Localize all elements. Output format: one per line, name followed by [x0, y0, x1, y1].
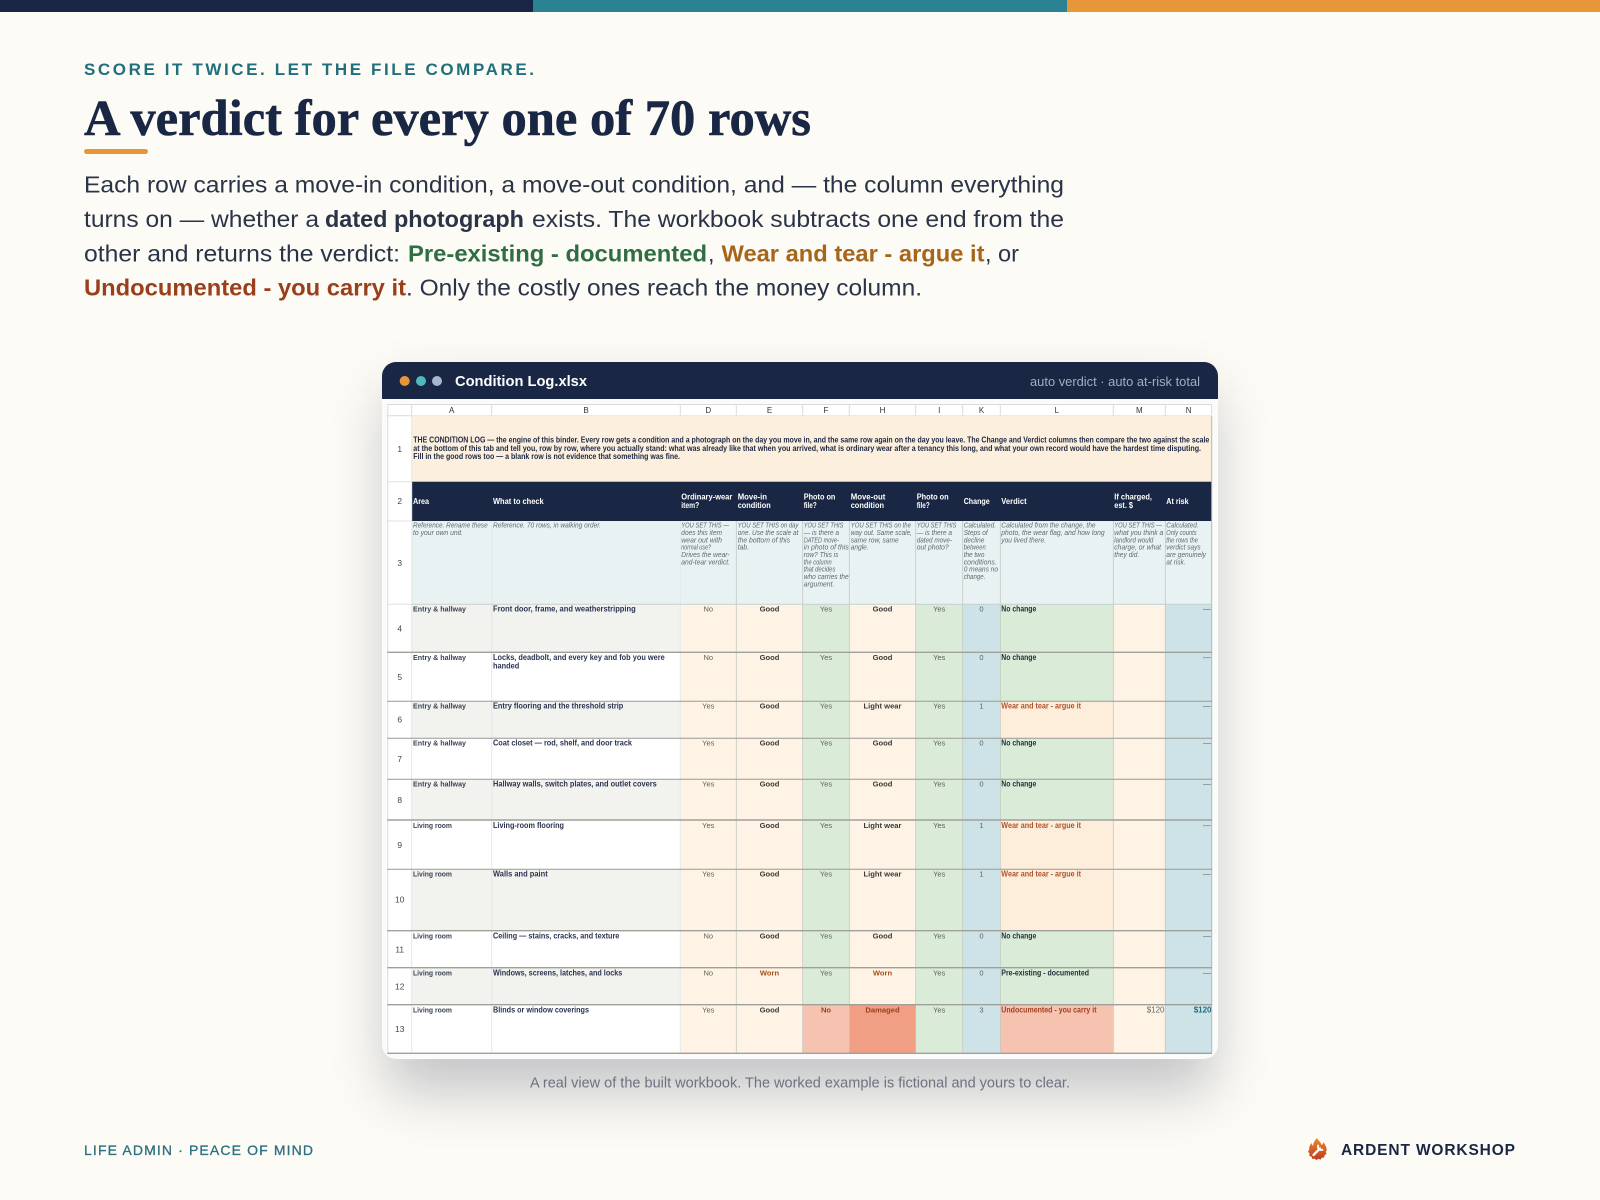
row 6: Yes [702, 702, 715, 711]
spreadsheet [387, 404, 1212, 1053]
row 7: Yes [820, 739, 832, 748]
row 13: Blinds or window coverings [493, 1006, 590, 1014]
row 12: Yes [820, 968, 832, 978]
row 4: No [704, 605, 713, 614]
row 13: Yes [933, 1006, 946, 1014]
row 13: 3 [979, 1006, 984, 1014]
row 10: Yes [702, 870, 715, 879]
row 9: Yes [820, 821, 832, 830]
data cell fills [412, 604, 1212, 1053]
row 13: Yes [702, 1006, 715, 1014]
row 11: Good [873, 932, 893, 940]
row 3: column notes: they did. [1114, 550, 1139, 559]
column letters: M [1136, 406, 1143, 415]
row 2: table header: What to check [493, 497, 544, 506]
row 12: Yes [933, 968, 946, 978]
spreadsheet window [382, 362, 1218, 1059]
row 5: Locks, deadbolt, and every key and fob you were [493, 653, 665, 662]
row 6: Entry & hallway [413, 702, 467, 711]
row 3: column notes: landlord would [1114, 535, 1154, 544]
row 5: Good [760, 653, 780, 662]
row numbers: 10 [395, 894, 405, 904]
row 1: banner: at the bottom of this tab and tell you, row by row, where you actually stand: what was already like that when you arrived, what is ordinary wear after a tenancy this long, and what your own record would have the hardest time disputing. [413, 444, 1201, 453]
intro paragraph: dated photograph [325, 206, 524, 232]
row 6: Good [760, 702, 780, 711]
row 2: table header: condition [738, 501, 771, 510]
row 9 [413, 821, 1211, 830]
row 4: Good [873, 605, 893, 614]
row 3: column notes: one. Use the scale at [738, 528, 799, 537]
row 4: No change [1001, 605, 1037, 614]
row 3: column notes: and-tear verdict. [681, 557, 730, 566]
row 8: Yes [933, 780, 946, 789]
row 13 [413, 1006, 1212, 1014]
row 10: Good [760, 870, 780, 879]
row 3: column notes: angle. [851, 543, 869, 552]
row 6: Wear and tear - argue it [1001, 702, 1081, 711]
row 12: No [704, 968, 713, 978]
row 10: Living room [413, 870, 452, 879]
row 10: Walls and paint [493, 870, 548, 879]
row 5: 0 [979, 653, 984, 662]
row 3: column notes: same row, same [851, 535, 899, 544]
row 12: — [1203, 968, 1211, 978]
row 7 [413, 739, 1211, 748]
row 11: Yes [820, 932, 832, 940]
title bar: Condition Log.xlsx [455, 373, 588, 390]
row 2: table header: Photo on [804, 492, 836, 502]
row 13: Good [760, 1006, 780, 1014]
column letters: F [824, 406, 829, 415]
row 2: table header: Move-out [851, 492, 886, 502]
row 2: table header: Change [964, 497, 990, 506]
row 8: Good [760, 780, 780, 789]
row 10: Yes [820, 870, 832, 879]
row 3: column notes: between [964, 543, 986, 552]
intro paragraph: or [998, 241, 1019, 267]
row 6: Light wear [864, 702, 902, 711]
intro paragraph: Wear and tear - argue it [722, 241, 985, 267]
row 2: table header: condition [851, 501, 884, 510]
eyebrow: SCORE IT TWICE. LET THE FILE COMPARE. [84, 60, 534, 79]
row 3: column notes: verdict says [1166, 543, 1201, 552]
row 1: banner [412, 416, 1212, 482]
row 11: No [704, 932, 713, 940]
column letters: K [979, 406, 985, 415]
row 13: $120 [1147, 1006, 1165, 1014]
row 9: Good [760, 821, 780, 830]
row numbers: 5 [397, 672, 402, 682]
row 13: No [821, 1006, 831, 1014]
row 11: Living room [413, 932, 452, 940]
intro paragraph: , [985, 241, 992, 267]
row 3: column notes: are genuinely [1166, 550, 1207, 559]
row 9: Yes [702, 821, 715, 830]
row 5: No [704, 653, 713, 662]
row 2: table header: If charged, [1114, 492, 1152, 502]
row 3: column notes: Calculated from the change, the [1001, 521, 1096, 530]
row 5: Entry & hallway [413, 653, 467, 662]
row 5: Good [873, 653, 893, 662]
row numbers: 6 [397, 714, 402, 724]
row 11: 0 [979, 932, 984, 940]
row 4: — [1203, 605, 1211, 614]
column letters: H [880, 406, 886, 415]
row 9: Wear and tear - argue it [1001, 821, 1081, 830]
intro paragraph: other and returns the verdict: [84, 241, 400, 267]
row 3: column notes: argument. [804, 579, 834, 588]
icon: flame with wrench [1308, 1138, 1327, 1160]
row 9: Living-room flooring [493, 821, 564, 830]
row 6: 1 [979, 702, 984, 711]
row 2: table header: Ordinary-wear [681, 492, 732, 502]
column letters [387, 404, 1212, 1053]
row 5: Yes [933, 653, 946, 662]
row 9: — [1203, 821, 1211, 830]
row numbers: 4 [397, 624, 402, 634]
row 3: column notes: wear out with [681, 535, 722, 544]
row 6: Yes [820, 702, 832, 711]
row numbers: 12 [395, 982, 405, 992]
row 7: Good [760, 739, 780, 748]
row 7: Coat closet — rod, shelf, and door track [493, 739, 633, 748]
row 3: column notes: who carries the [804, 572, 849, 581]
row 13: $120 [1194, 1006, 1212, 1014]
row 3: column notes: the column [804, 557, 832, 566]
row 9: Yes [933, 821, 946, 830]
grid lines [387, 416, 1212, 1053]
row 3: column notes: — is there a [803, 528, 839, 537]
row 3: column notes: row? This is [804, 550, 839, 559]
intro paragraph: turns on — whether a [84, 206, 320, 232]
row 3: column notes: to your own unit. [413, 528, 463, 537]
row 8: Yes [702, 780, 715, 789]
row 4: Yes [820, 605, 832, 614]
row 3: column notes: does this item [681, 528, 722, 537]
row 2: table header: Area [413, 497, 429, 506]
row 3: column notes: you lived there. [1000, 535, 1046, 544]
column letters: I [938, 406, 940, 415]
row 3: column notes: dated move- [917, 535, 952, 544]
row 3: column notes: Reference. Rename these [413, 521, 488, 530]
row 1: banner: Fill in the good rows too — a blank row is not evidence that something was fine. [413, 452, 680, 461]
row 7: Good [873, 739, 893, 748]
row 5: Yes [820, 653, 832, 662]
row 5: No change [1001, 653, 1037, 662]
row 7: 0 [979, 739, 984, 748]
row 12: Pre-existing - documented [1001, 968, 1089, 978]
row 11: Ceiling — stains, cracks, and texture [493, 932, 620, 940]
row 7: No change [1001, 739, 1037, 748]
row 10: Light wear [864, 870, 902, 879]
row numbers: 11 [395, 944, 404, 954]
row 6: Entry flooring and the threshold strip [493, 702, 623, 711]
row 2: table header: est. $ [1114, 501, 1133, 510]
row 8 [413, 780, 1211, 789]
row 3: column notes: conditions. [964, 557, 997, 566]
row 8: Entry & hallway [413, 780, 467, 789]
row 13: Undocumented - you carry it [1001, 1006, 1097, 1014]
row 6: Yes [933, 702, 946, 711]
row 2: table header: Photo on [917, 492, 949, 502]
row 9: Light wear [864, 821, 902, 830]
column letters: N [1186, 406, 1192, 415]
intro paragraph [84, 172, 1064, 301]
row 4: Front door, frame, and weatherstripping [493, 605, 636, 614]
row numbers: 9 [397, 840, 402, 850]
row 3: column notes: that decides [804, 565, 836, 574]
row 12: Windows, screens, latches, and locks [493, 968, 623, 978]
row 3: column notes: out photo? [917, 543, 949, 552]
row 3: column notes: Steps of [964, 528, 988, 537]
brand logo: ARDENT WORKSHOP [1341, 1142, 1515, 1159]
row 7: Yes [933, 739, 946, 748]
row 3: column notes: normal use? [681, 543, 712, 552]
row 10: 1 [979, 870, 984, 879]
intro paragraph: Each row carries a move-in condition, a move-out condition, and — the column everything [84, 172, 1064, 198]
row 10: Wear and tear - argue it [1001, 870, 1081, 879]
row 3: column notes: change. [964, 572, 985, 581]
row 6: — [1203, 702, 1211, 711]
row 3: column notes: the rows the [1166, 535, 1198, 544]
row 2: table header: Move-in [738, 492, 767, 502]
intro paragraph: Pre-existing - documented [408, 241, 707, 267]
row 3: column notes: YOU SET THIS on day [738, 521, 799, 530]
row 10 [413, 870, 1211, 879]
row 4 [413, 605, 1211, 614]
row 4: Yes [933, 605, 946, 614]
row 3: column notes: YOU SET THIS [917, 521, 956, 530]
title: A verdict for every one of 70 rows [84, 91, 811, 147]
row 8: — [1203, 780, 1211, 789]
row 3: column notes: the bottom of this [738, 535, 790, 544]
intro paragraph: Undocumented - you carry it [84, 275, 406, 301]
row 3: column notes: YOU SET THIS on the [851, 521, 911, 530]
row 2: table header: At risk [1166, 497, 1189, 506]
row 3: column notes: DATED move- [804, 535, 839, 544]
intro paragraph: exists. The workbook subtracts one end from the [532, 206, 1064, 232]
row 8: Hallway walls, switch plates, and outlet covers [493, 780, 657, 789]
caption: A real view of the built workbook. The worked example is fictional and yours to clear. [530, 1075, 1070, 1091]
row 3: column notes: at risk. [1166, 557, 1186, 566]
title bar [382, 362, 1218, 399]
row 9: Living room [413, 821, 452, 830]
row numbers: 2 [397, 496, 402, 506]
title bar: auto verdict · auto at-risk total [1030, 374, 1200, 389]
row 3: column notes: tab. [738, 543, 749, 552]
row 11: Good [760, 932, 780, 940]
row 8: Yes [820, 780, 832, 789]
row 12: Worn [873, 968, 892, 978]
row 5 [413, 653, 1211, 670]
row 8: 0 [979, 780, 984, 789]
top colour bar [0, 0, 1600, 12]
row 3: column notes: Only counts [1166, 528, 1197, 537]
column letters: D [705, 406, 711, 415]
row 11: — [1203, 932, 1211, 940]
row 4: Good [760, 605, 780, 614]
row 12: Living room [413, 968, 452, 978]
footer left label: LIFE ADMIN · PEACE OF MIND [84, 1142, 313, 1158]
row numbers: 13 [395, 1024, 405, 1034]
row 2: table header: item? [681, 501, 699, 510]
row 1: banner: THE CONDITION LOG — the engine of this binder. Every row gets a condition and a photograph on the day you move in, and the same row again on the day you leave. The Change and Verdict columns then compare the two against the scale [413, 436, 1210, 445]
row 3: column notes: 0 means no [964, 565, 998, 574]
row 3: column notes: YOU SET THIS — [681, 521, 729, 530]
row 7: Yes [702, 739, 715, 748]
row 6 [413, 702, 1211, 711]
row 3: column notes: — is there a [916, 528, 952, 537]
row 3: column notes: YOU SET THIS [804, 521, 843, 530]
row 9: 1 [979, 821, 984, 830]
row 8: No change [1001, 780, 1037, 789]
row 3: column notes: Drives the wear- [681, 550, 730, 559]
row 13: Damaged [865, 1006, 900, 1014]
brand logo [1308, 1138, 1515, 1160]
row 2: table header [412, 482, 1212, 521]
row 3: column notes: Calculated. [964, 521, 996, 530]
row numbers: 1 [397, 444, 402, 454]
row 3: column notes: YOU SET THIS — [1114, 521, 1162, 530]
row numbers [395, 444, 405, 1034]
row numbers: 8 [397, 795, 402, 805]
row 5: handed [493, 662, 519, 670]
row 13: Living room [413, 1006, 452, 1014]
row 4: 0 [979, 605, 984, 614]
row 12 [413, 968, 1211, 978]
row 11 [413, 932, 1211, 940]
row 3: column notes: what you think a [1114, 528, 1163, 537]
row 11: No change [1001, 932, 1037, 940]
row 10: Yes [933, 870, 946, 879]
row 3: column notes: Reference. 70 rows, in walking order. [493, 521, 601, 530]
row 7: Entry & hallway [413, 739, 467, 748]
window shadow [386, 392, 1214, 1092]
row 2: table header: file? [917, 501, 930, 510]
intro paragraph: . Only the costly ones reach the money column. [406, 275, 922, 301]
title underline [84, 149, 148, 154]
row 3: column notes: way out. Same scale, [851, 528, 912, 537]
row 4: Entry & hallway [413, 605, 467, 614]
row 3: column notes: in photo of this [804, 543, 849, 552]
row 12: Worn [760, 968, 779, 978]
column letters: E [767, 406, 772, 415]
column letters: A [449, 406, 455, 415]
row 3: column notes [412, 521, 1212, 604]
row numbers: 3 [397, 558, 402, 568]
row 3: column notes: Calculated. [1166, 521, 1199, 530]
intro paragraph: , [708, 241, 714, 267]
row 11: Yes [933, 932, 946, 940]
column letters: B [583, 406, 589, 415]
column letters: L [1055, 406, 1060, 415]
row 7: — [1203, 739, 1211, 748]
row numbers: 7 [397, 754, 402, 764]
row 3: column notes: charge, or what [1114, 543, 1162, 552]
row 12: 0 [979, 968, 984, 978]
row 3: column notes: decline [964, 535, 984, 544]
row 10: — [1203, 870, 1211, 879]
row 5: — [1203, 653, 1211, 662]
row 3: column notes: the two [964, 550, 984, 559]
row 2: table header: file? [804, 501, 817, 510]
row 8: Good [873, 780, 893, 789]
row 3: column notes: photo, the wear flag, and how long [1000, 528, 1105, 537]
row 2: table header: Verdict [1001, 497, 1027, 506]
